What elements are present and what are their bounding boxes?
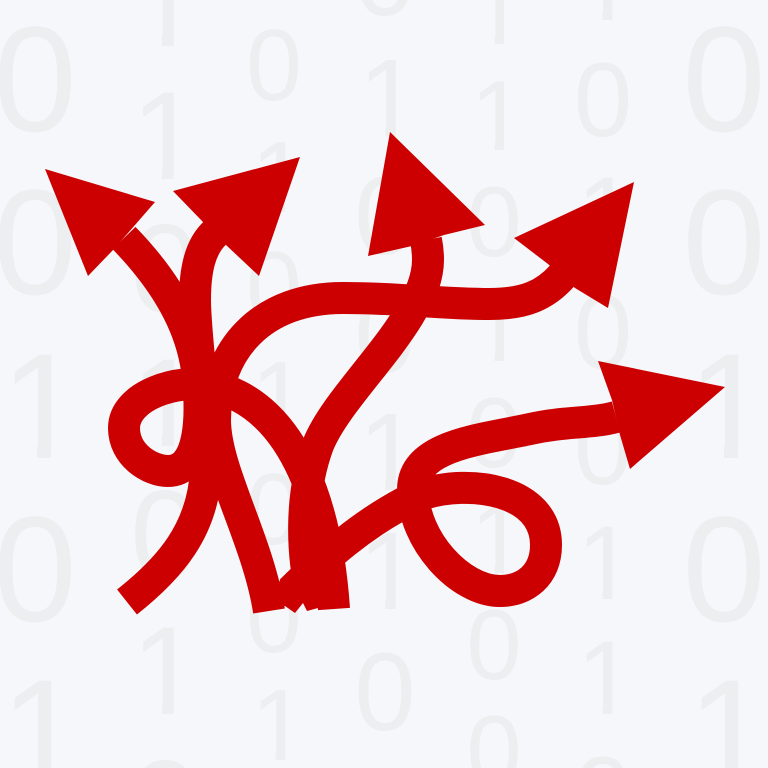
arrow: looping path to right head <box>291 361 725 591</box>
binary digit background: 1 <box>131 602 201 741</box>
binary digit background: 0 <box>246 562 302 674</box>
binary digit background: 0 <box>130 466 200 605</box>
binary digit background: 1 <box>131 334 201 473</box>
binary digit background: 0 <box>682 0 766 163</box>
binary digit background: 0 <box>682 485 766 653</box>
binary digit background: 0 <box>466 589 522 700</box>
binary digit background: 1 <box>577 505 635 622</box>
arrow: tail lower left to top left-centre head <box>127 157 300 602</box>
binary digit background: 0 <box>574 390 632 507</box>
binary digit background: 0 <box>354 155 416 278</box>
binary digit background: 1 <box>358 391 420 514</box>
binary digit background: 0 <box>682 158 766 326</box>
binary digit background: 1 <box>470 60 526 171</box>
binary digit background: 0 <box>354 631 416 754</box>
binary digit background: 0 <box>246 232 302 344</box>
arrow: path to top centre head <box>270 132 485 613</box>
binary digit background: 1 <box>470 483 526 594</box>
binary digit background: 0 <box>130 200 200 339</box>
binary digit background: 0 <box>246 454 302 566</box>
binary digit background: 1 <box>577 156 635 273</box>
binary digit background: 1 <box>131 67 201 206</box>
binary digit background: 1 <box>358 510 420 633</box>
binary digit background: 1 <box>251 122 307 234</box>
binary digit background: 0 <box>246 10 302 122</box>
binary digit background: 1 <box>470 271 526 382</box>
binary digit background: 1 <box>358 37 420 160</box>
binary digit background: 1 <box>577 620 635 737</box>
binary digit background: 0 <box>354 273 416 396</box>
arrow: looping path to top left head <box>45 169 334 609</box>
binary digit background: 0 <box>574 274 632 391</box>
binary digit background: 1 <box>251 342 307 454</box>
binary digit background: 1 <box>0 322 84 490</box>
arrow: path to upper right head <box>215 182 634 611</box>
binary digit background: 0 <box>466 377 522 488</box>
binary digit background: 0 <box>466 166 522 277</box>
binary digit background: 0 <box>574 42 632 159</box>
